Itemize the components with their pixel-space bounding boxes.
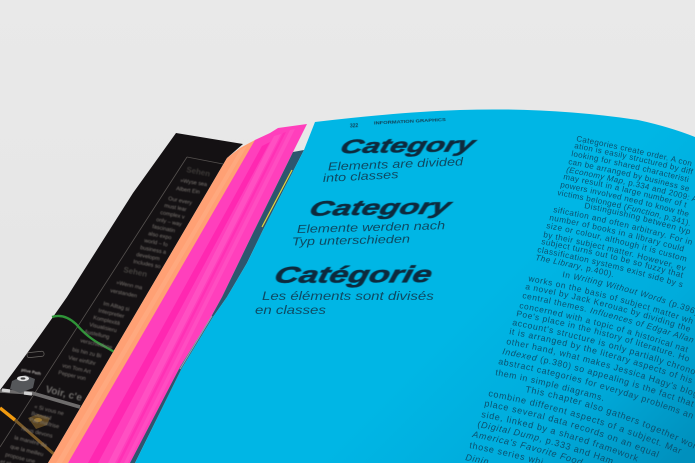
black page texts: Nous devons <box>21 426 53 440</box>
light pink stripe <box>108 134 281 463</box>
heading: Category (English): Category <box>338 133 480 158</box>
text block: body copy: concerned with a topic of a historical nat <box>520 304 688 352</box>
black page texts: »Wyse sea <box>180 178 208 188</box>
text block: body copy: size or colour, although it is custom <box>546 223 686 262</box>
yellow strip <box>262 170 292 227</box>
heading: Category (German): Category <box>307 194 456 221</box>
black page texts: world – fo <box>143 238 168 249</box>
black page texts: bis hin zu Bi <box>72 347 102 360</box>
icon: brown hexagon marker <box>28 414 50 429</box>
panel: orange page edges <box>48 130 278 463</box>
orange route line <box>0 408 15 420</box>
text block: body copy: subject turns out to be so fuzzy that <box>542 240 684 278</box>
black page texts: developm <box>136 252 161 263</box>
black page texts: Pepper von <box>58 370 86 382</box>
green route line <box>52 316 118 354</box>
text block: body copy: powers involved need to know the <box>560 183 688 216</box>
text block: body copy: other hand, what makes Jessica Hagy's blog <box>506 340 695 398</box>
dark pink stripe <box>88 142 270 463</box>
subtext: French: en classes <box>255 303 326 317</box>
text block: body copy: may result in a large number of t <box>564 175 687 208</box>
black page texts: must lear <box>164 203 187 213</box>
black page texts: Includes so <box>133 259 161 270</box>
black page texts: Vier einführ <box>68 355 96 367</box>
text block: body copy: them in simple diagrams. <box>496 370 603 401</box>
light edge highlight <box>180 316 212 369</box>
black page texts: Im Alltag si <box>103 301 130 313</box>
text block: body copy: victims belonged (Function, p.341). <box>558 190 690 226</box>
black page texts: Voir, c'e <box>44 384 83 404</box>
text block: body copy: sification and often arbitrary. For in <box>554 207 692 245</box>
heading: Catégorie (French): Catégorie <box>272 262 435 288</box>
text block: body copy: Distinguishing between typ <box>584 202 690 236</box>
white band segment <box>2 390 32 394</box>
black page texts: Sehen <box>186 165 211 179</box>
text block: body copy: (Economy Map, p.334 and 2009: A <box>566 166 695 201</box>
black page texts: Sehen <box>123 265 148 279</box>
text block: body copy: The Library, p.400). <box>536 254 613 278</box>
text block: body copy: side, linked by a shared framework <box>482 412 638 462</box>
black page texts: « Si vous ne <box>34 404 64 417</box>
text block: body copy: ation is easily structured by diff <box>574 144 694 174</box>
icon: hexagon marker <box>10 375 35 393</box>
black page texts: la manière da <box>14 435 48 449</box>
black page texts: Bouvard <box>31 411 52 422</box>
page number: 322 <box>350 123 359 129</box>
subtext: French <box>255 289 434 317</box>
grey band <box>0 391 80 407</box>
text block: body copy: a novel by Jack Kerouac by dividing the <box>526 285 690 332</box>
text block: body copy: classification systems exist side by s <box>538 247 683 287</box>
panel: black back page <box>0 133 243 463</box>
text block: body copy: This chapter also gathers together wor <box>526 386 695 448</box>
black page texts: »Wenn ma <box>116 280 144 292</box>
text block: body copy: can be arranged by business se <box>568 160 689 192</box>
text block: body copy: looking for shared characteristi <box>572 150 689 182</box>
text block: body copy: by their subject matter. However, ev <box>544 231 686 271</box>
text block: body copy: combine different aspects of a subject. Mar <box>488 392 682 454</box>
panel: blue page <box>135 110 695 463</box>
text block: body copy: abstract categories for everyday problems an <box>498 358 693 418</box>
black page texts: fascinatin <box>152 224 176 234</box>
black page texts: ptive Path <box>21 367 42 376</box>
black page texts: Interpretier <box>98 308 125 320</box>
subtext: German <box>292 219 445 248</box>
black page texts: Albert Ein <box>176 186 200 196</box>
black page texts: Komplexitä <box>93 315 121 327</box>
black page texts: verschiedene <box>80 338 113 351</box>
text block: body copy: Poe's place in the history of literature. Ho <box>516 310 689 362</box>
black page texts: Our every <box>168 196 193 207</box>
panel: dark inner page edge <box>130 150 304 463</box>
black page texts: Pas maîtrise <box>29 417 60 430</box>
black page texts: Austellung <box>84 329 110 341</box>
black page texts: verstanden <box>110 288 137 300</box>
black page texts: que la meilleu <box>10 444 44 458</box>
subtext: French: Les éléments sont divisés <box>262 289 434 303</box>
subtext: English: Elements are divided <box>328 155 464 173</box>
label badge <box>27 351 44 358</box>
black page texts: only – way <box>156 217 183 228</box>
running header: INFORMATION GRAPHICS <box>374 117 446 126</box>
page frame line <box>0 157 223 447</box>
subtext: German: Elemente werden nach <box>297 219 445 236</box>
black page texts: von Tom Art <box>62 363 92 376</box>
light pink stripe <box>124 129 295 463</box>
panel: pink page edges <box>68 124 307 463</box>
text block: body copy: Categories create order. A con <box>576 136 692 166</box>
text block: body copy <box>465 136 695 463</box>
text block: body copy: Indexed (p.380) so appealing is the fact that <box>502 348 694 407</box>
text block: body copy: account's structure is only partially chrono <box>512 320 695 374</box>
black page texts: complex v <box>160 210 185 221</box>
thin dark pink stripe <box>117 132 286 463</box>
black page texts: also expo <box>148 231 172 241</box>
text block: body copy: place several data records on an equal <box>484 400 660 458</box>
subtext: German: Typ unterschieden <box>292 232 410 248</box>
subtext: English: into classes <box>322 167 399 185</box>
subtext: English <box>322 155 464 185</box>
black page texts: business a <box>140 245 167 256</box>
text block: body copy: works on the basis of subject matter wh <box>528 276 693 324</box>
black page texts: Visualisieru <box>89 322 117 334</box>
black page texts <box>0 165 211 463</box>
text block: body copy: number of books in a library could <box>550 216 684 252</box>
brown route line <box>15 420 55 455</box>
text block: body copy: central themes. Influences of Edgar Allan <box>522 294 694 342</box>
